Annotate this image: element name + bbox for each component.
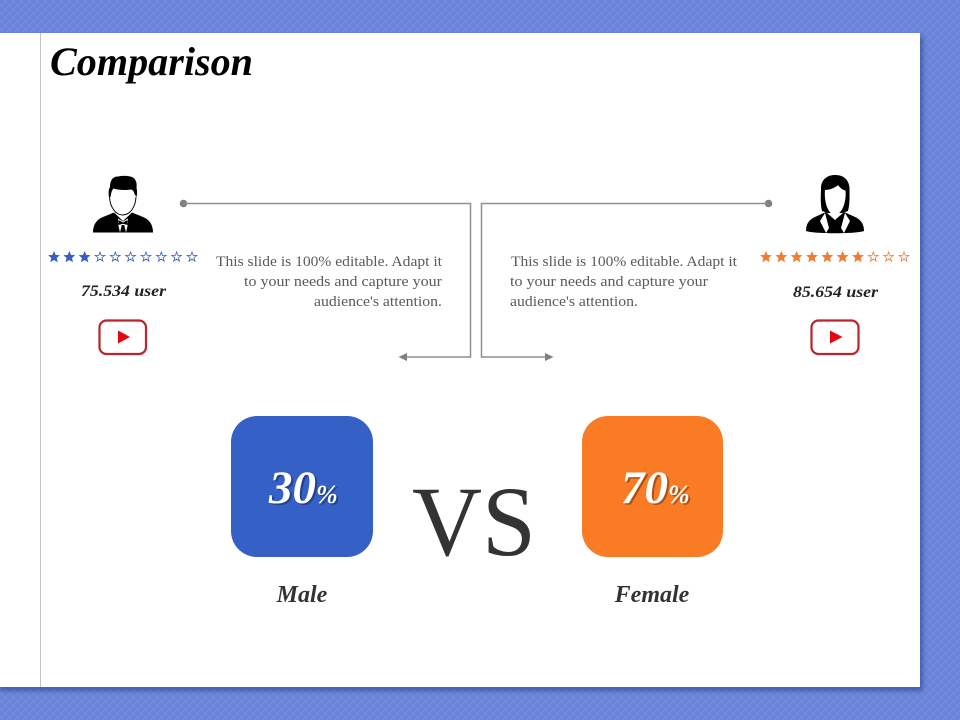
card: female percentage [582,416,723,557]
text block: female description: to your needs and capture your [510,274,708,290]
text block: male description: to your needs and capture your [244,274,442,290]
icon: male user [93,176,153,232]
icon: male video play button [100,320,146,354]
card: male percentage: 30% [268,462,338,514]
rating: female stars [760,251,909,262]
text block: female description [510,254,737,310]
rating: male stars [48,251,197,262]
card: female percentage: 70% [623,464,692,516]
icon: female user [806,175,864,233]
text block: female description: audience's attention. [510,294,638,310]
female label: Female [614,582,690,608]
text block: female description: This slide is 100% editable. Adapt it [511,254,737,270]
male label: Male [276,582,328,608]
female user count: 85.654 user [793,284,879,301]
connector: right dot, bracket and arrow [482,200,772,361]
text block: male description: audience's attention. [314,294,442,310]
icon: female video play button [812,320,858,354]
male user count: 75.534 user [81,283,167,300]
VS label: VS [412,466,536,577]
text block: male description [216,254,442,310]
connector: left dot, bracket and arrow [180,200,470,361]
title: Comparison [50,39,253,84]
text block: male description: This slide is 100% editable. Adapt it [216,254,442,270]
card: male percentage [231,416,373,557]
card: male percentage: 30% [270,464,340,516]
card: female percentage: 70% [621,462,690,514]
